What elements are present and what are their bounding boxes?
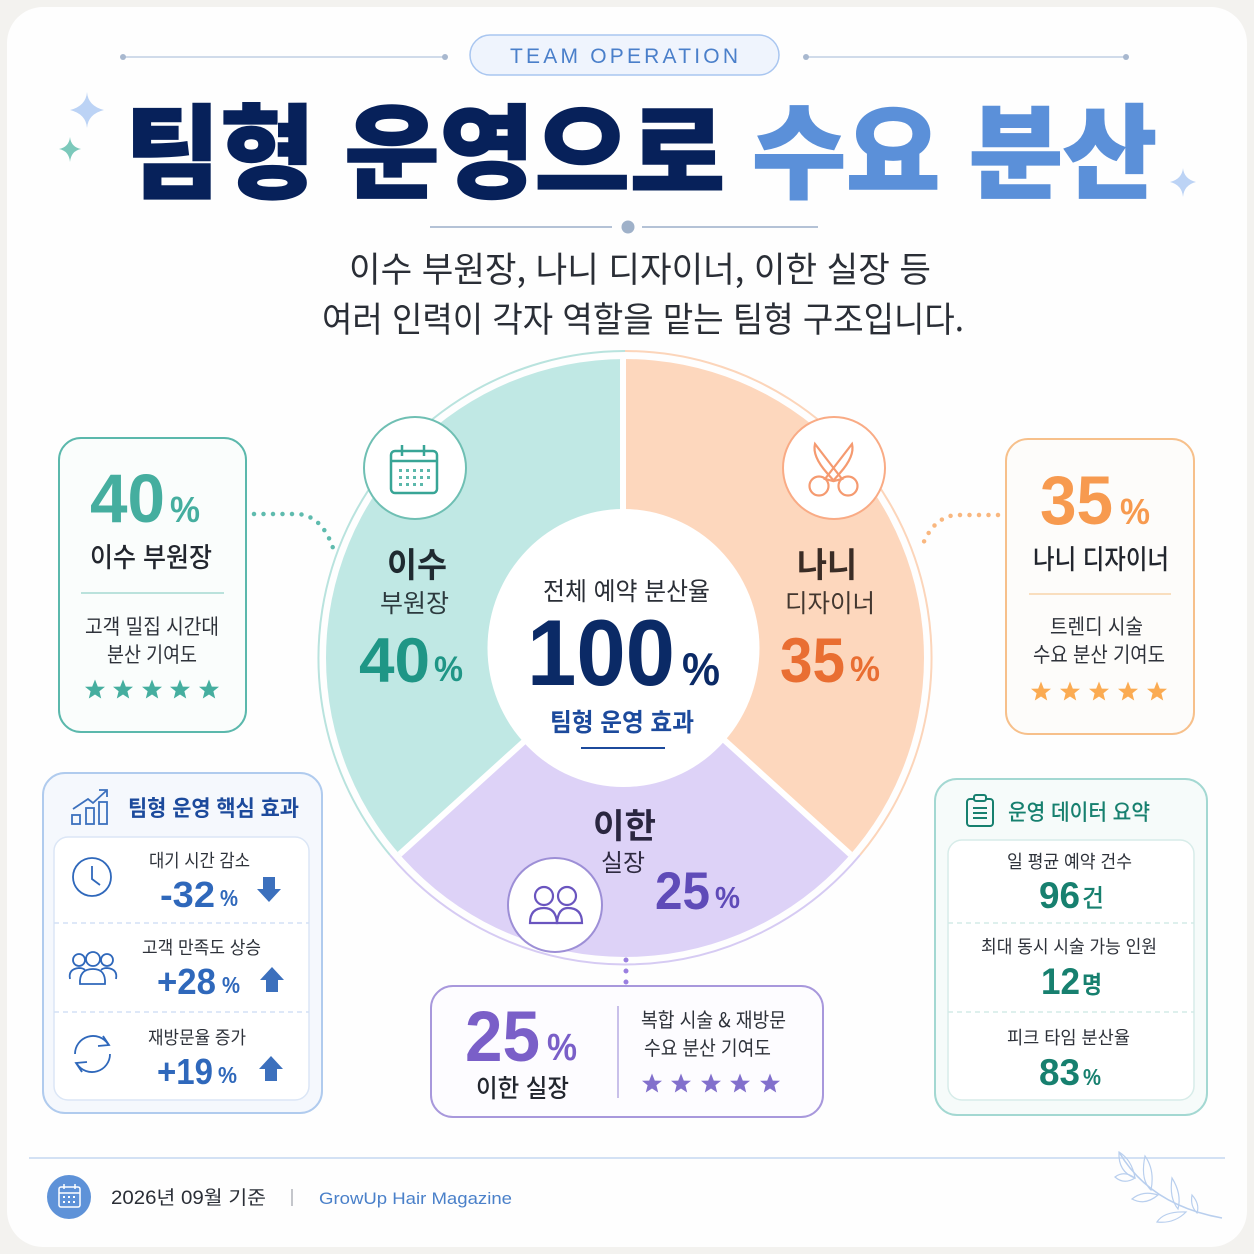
- header badge: TEAM OPERATION: [120, 35, 1129, 75]
- panel: 이수 부원장 card: [59, 438, 246, 732]
- icon: sparkles: [59, 92, 1196, 197]
- arrow: down: [257, 877, 281, 902]
- icon: clock: [73, 858, 111, 896]
- icon: team: [508, 858, 602, 952]
- heading: 운영 데이터 요약: [1008, 795, 1150, 827]
- arrow: up: [259, 1056, 283, 1081]
- metric: 일 평균 예약 건수: 일 평균 예약 건수: [1007, 848, 1132, 874]
- metric: 대기 시간 감소: %: [220, 885, 238, 911]
- icon: footer calendar: [47, 1175, 91, 1219]
- metric: 고객 만족도 상승: 고객 만족도 상승: [142, 934, 261, 960]
- panel: 이수 부원장 card: %: [170, 489, 200, 530]
- panel: 이수 부원장 card: 40: [90, 460, 165, 537]
- metric: 일 평균 예약 건수: 96: [1039, 875, 1080, 916]
- metric: 피크 타임 분산율: [1007, 1024, 1130, 1093]
- icon: clipboard: [967, 795, 993, 826]
- metric: 재방문율 증가: +19: [157, 1051, 213, 1092]
- panel: 나니 디자이너 card: 나니 디자이너: [1033, 538, 1169, 577]
- title: [125, 73, 1157, 220]
- subtitle: [322, 242, 964, 343]
- icon: leaf branch: [1115, 1152, 1222, 1222]
- source text: GrowUp Hair Magazine: [319, 1189, 512, 1208]
- segment label: 이수: 40: [359, 626, 430, 696]
- metric: 피크 타임 분산율: 피크 타임 분산율: [1007, 1024, 1130, 1050]
- panel: 이한 실장 card: 복합 시술 & 재방문: [641, 1004, 786, 1033]
- icon: refresh: [75, 1036, 110, 1072]
- metric: 최대 동시 시술 가능 인원: 명: [1082, 965, 1102, 1000]
- header badge: TEAM OPERATION: TEAM OPERATION: [510, 45, 738, 68]
- title: 수요 분산: [752, 73, 1157, 220]
- center label: %: [682, 643, 720, 695]
- metric: 피크 타임 분산율: 83: [1039, 1052, 1080, 1093]
- panel: 운영 데이터 요약: [935, 779, 1207, 1115]
- center label: 팀형 운영 효과: [550, 703, 694, 739]
- metric: 재방문율 증가: %: [218, 1062, 237, 1088]
- metric: 일 평균 예약 건수: 건: [1082, 879, 1104, 915]
- segment label: 이수: 이수: [387, 538, 447, 587]
- segment label: 나니: 나니: [797, 538, 857, 587]
- connector: bottom: [624, 960, 628, 985]
- metric: 최대 동시 시술 가능 인원: 최대 동시 시술 가능 인원: [981, 933, 1157, 959]
- panel: 나니 디자이너 card: 수요 분산 기여도: [1033, 639, 1165, 669]
- segment label: 나니: [780, 538, 880, 696]
- metric: 고객 만족도 상승: %: [222, 972, 240, 998]
- segment label: 이한: %: [715, 880, 740, 915]
- title: 팀형 운영으로: [125, 73, 725, 220]
- segment label: 나니: 35: [780, 626, 845, 696]
- metric: 재방문율 증가: [148, 1024, 246, 1092]
- center label: 전체 예약 분산율: [543, 572, 710, 608]
- panel: 이한 실장 card: [431, 986, 823, 1117]
- icon: people: [70, 952, 116, 984]
- panel: 이한 실장 card: %: [547, 1027, 577, 1069]
- segment label: 이수: %: [434, 650, 463, 689]
- segment label: 이한: 이한: [593, 799, 656, 848]
- panel: 이수 부원장 card: 고객 밀집 시간대: [85, 611, 219, 641]
- metric: 대기 시간 감소: -32: [160, 874, 215, 915]
- subtitle: 여러 인력이 각자 역할을 맡는 팀형 구조입니다.: [322, 292, 964, 343]
- metric: 일 평균 예약 건수: [1007, 848, 1132, 916]
- title divider: [430, 220, 818, 234]
- metric: 최대 동시 시술 가능 인원: [981, 933, 1157, 1002]
- panel: 이수 부원장 card: 이수 부원장: [90, 536, 212, 575]
- segment label: 이한: 실장: [601, 843, 645, 878]
- center label: 100: [527, 600, 675, 705]
- metric: 고객 만족도 상승: +28: [157, 961, 216, 1002]
- date text: 2026년 09월 기준: [111, 1187, 266, 1209]
- segment label: 이수: 부원장: [380, 584, 449, 620]
- connector: left: [254, 514, 333, 548]
- segment label: 이수: [359, 538, 463, 696]
- metric: 대기 시간 감소: [149, 847, 250, 915]
- panel: 나니 디자이너 card: 35: [1040, 462, 1113, 539]
- panel: 팀형 운영 핵심 효과: [43, 773, 322, 1113]
- metric: 대기 시간 감소: 대기 시간 감소: [149, 847, 250, 873]
- panel: 이한 실장 card: 수요 분산 기여도: [644, 1032, 771, 1061]
- center label: [527, 572, 720, 748]
- arrow: up: [260, 967, 284, 992]
- connector: right: [921, 515, 998, 549]
- metric: 고객 만족도 상승: [142, 934, 261, 1002]
- panel: 나니 디자이너 card: %: [1120, 491, 1150, 532]
- heading: 팀형 운영 핵심 효과: [128, 791, 299, 823]
- footer: [29, 1158, 1225, 1219]
- icon: calendar: [364, 417, 466, 519]
- subtitle: 이수 부원장, 나니 디자이너, 이한 실장 등: [349, 242, 931, 293]
- metric: 최대 동시 시술 가능 인원: 12: [1041, 961, 1080, 1002]
- metric: 재방문율 증가: 재방문율 증가: [148, 1024, 246, 1050]
- segment label: 이한: [593, 799, 740, 921]
- icon: scissors: [783, 417, 885, 519]
- donut chart: [300, 340, 950, 970]
- metric: 피크 타임 분산율: %: [1083, 1064, 1101, 1090]
- panel: 나니 디자이너 card: 트렌디 시술: [1050, 611, 1143, 641]
- panel: 나니 디자이너 card: [1006, 439, 1194, 734]
- segment label: 이한: 25: [655, 862, 710, 921]
- segment label: 나니: %: [850, 650, 880, 689]
- icon: growth chart: [72, 790, 107, 824]
- panel: 이한 실장 card: 25: [465, 998, 540, 1077]
- panel: 이수 부원장 card: 분산 기여도: [107, 639, 197, 669]
- segment label: 나니: 디자이너: [785, 584, 875, 620]
- panel: 이한 실장 card: 이한 실장: [476, 1069, 569, 1105]
